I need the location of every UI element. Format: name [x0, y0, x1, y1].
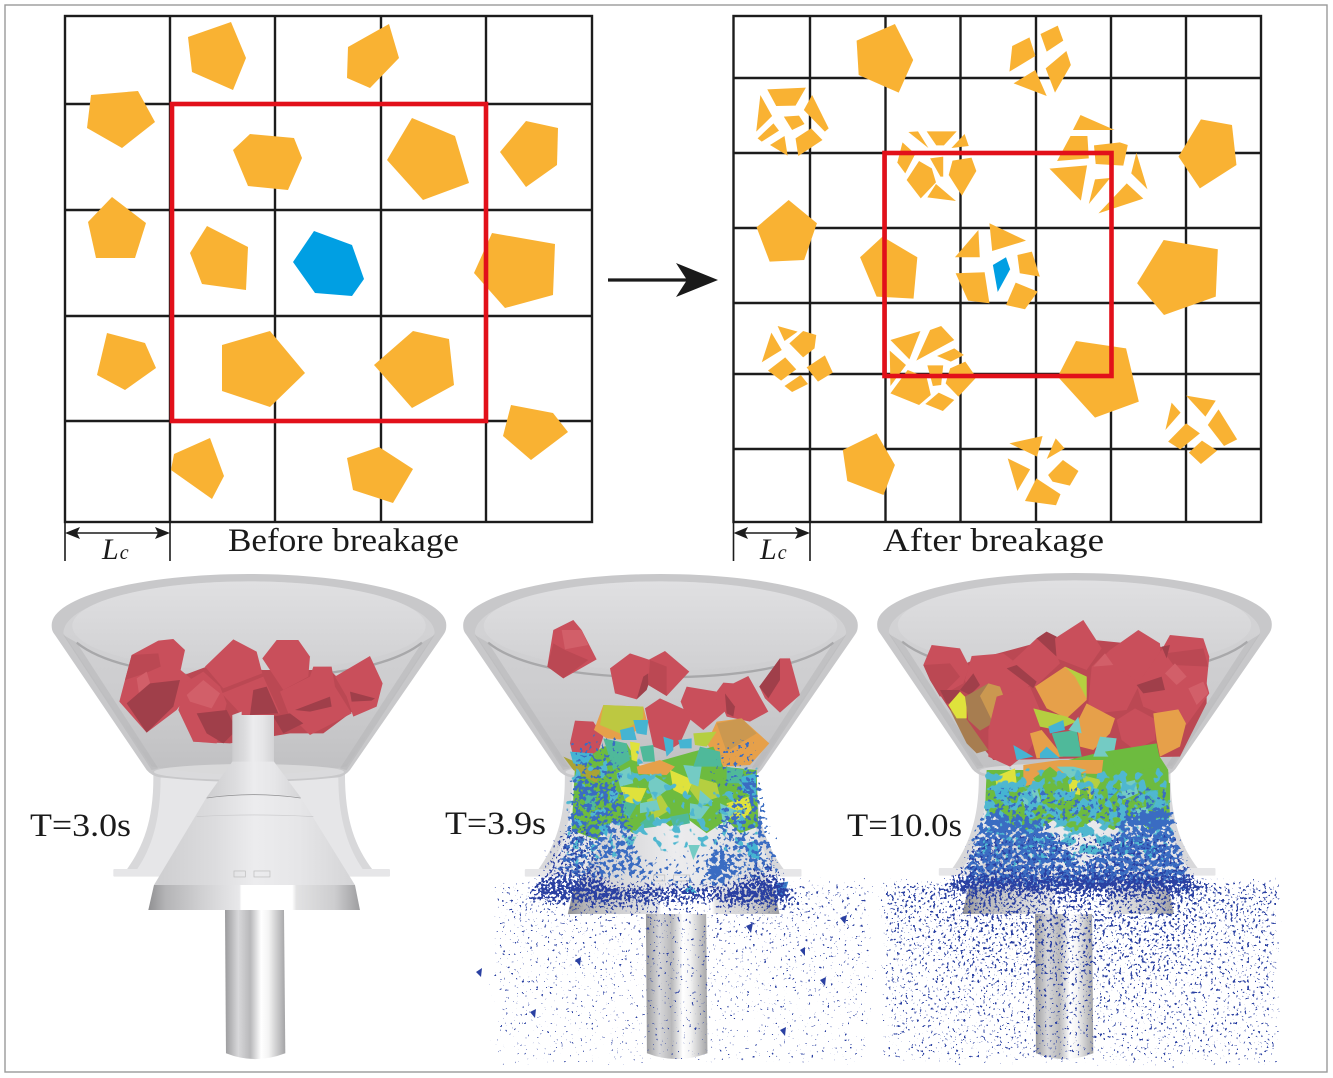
funnel body [463, 574, 858, 877]
dimension: Lc after [734, 522, 810, 566]
fragment: blue [993, 257, 1010, 292]
arrow: before to after [608, 263, 718, 297]
funnel body [877, 573, 1272, 876]
time label: T=3.0s [30, 808, 131, 844]
dimension: Lc after: Lc [759, 533, 787, 566]
funnel body [52, 574, 446, 877]
rocks and large fragments [547, 620, 800, 898]
particle cloud: debris falling [490, 820, 875, 1068]
shaft [225, 908, 285, 1059]
label: before breakage: Before breakage [228, 523, 459, 559]
shaft [646, 908, 707, 1059]
particle cloud: blue fragments [955, 785, 1195, 890]
time label: T=10.0s [847, 808, 962, 844]
inner cone [568, 766, 779, 914]
grid: after [734, 16, 1261, 522]
inner cone [148, 762, 360, 910]
particle cloud: debris falling [878, 830, 1282, 1068]
shaft [1035, 908, 1093, 1059]
inner cone [962, 766, 1174, 914]
fragments: upper half [756, 24, 1236, 315]
particle cloud: neck fragments [975, 768, 1178, 870]
dimension: Lc before [65, 522, 170, 566]
particle: highlighted blue [293, 231, 364, 296]
fragments: lower half [762, 326, 1237, 505]
panel: before breakage [65, 16, 592, 566]
label: after breakage: After breakage [883, 523, 1104, 559]
panel: crusher at T=3.0s [30, 574, 446, 1059]
red rocks [119, 639, 383, 743]
particle cloud: neck fragments [560, 745, 765, 870]
selection square: after [884, 153, 1112, 376]
rocks and large fragments [923, 620, 1209, 833]
stem [232, 712, 274, 765]
panel: crusher at T=3.9s [445, 574, 875, 1068]
panel: crusher at T=10.0s [847, 573, 1282, 1068]
larger debris pieces [476, 915, 847, 1036]
dimension: Lc before: Lc [101, 533, 129, 566]
selection square: before [172, 104, 486, 421]
particles: before [87, 22, 568, 503]
panel: after breakage [734, 16, 1261, 566]
particle cloud: blue fragments [552, 730, 786, 895]
time label: T=3.9s [445, 806, 546, 842]
grid: before [65, 16, 592, 522]
